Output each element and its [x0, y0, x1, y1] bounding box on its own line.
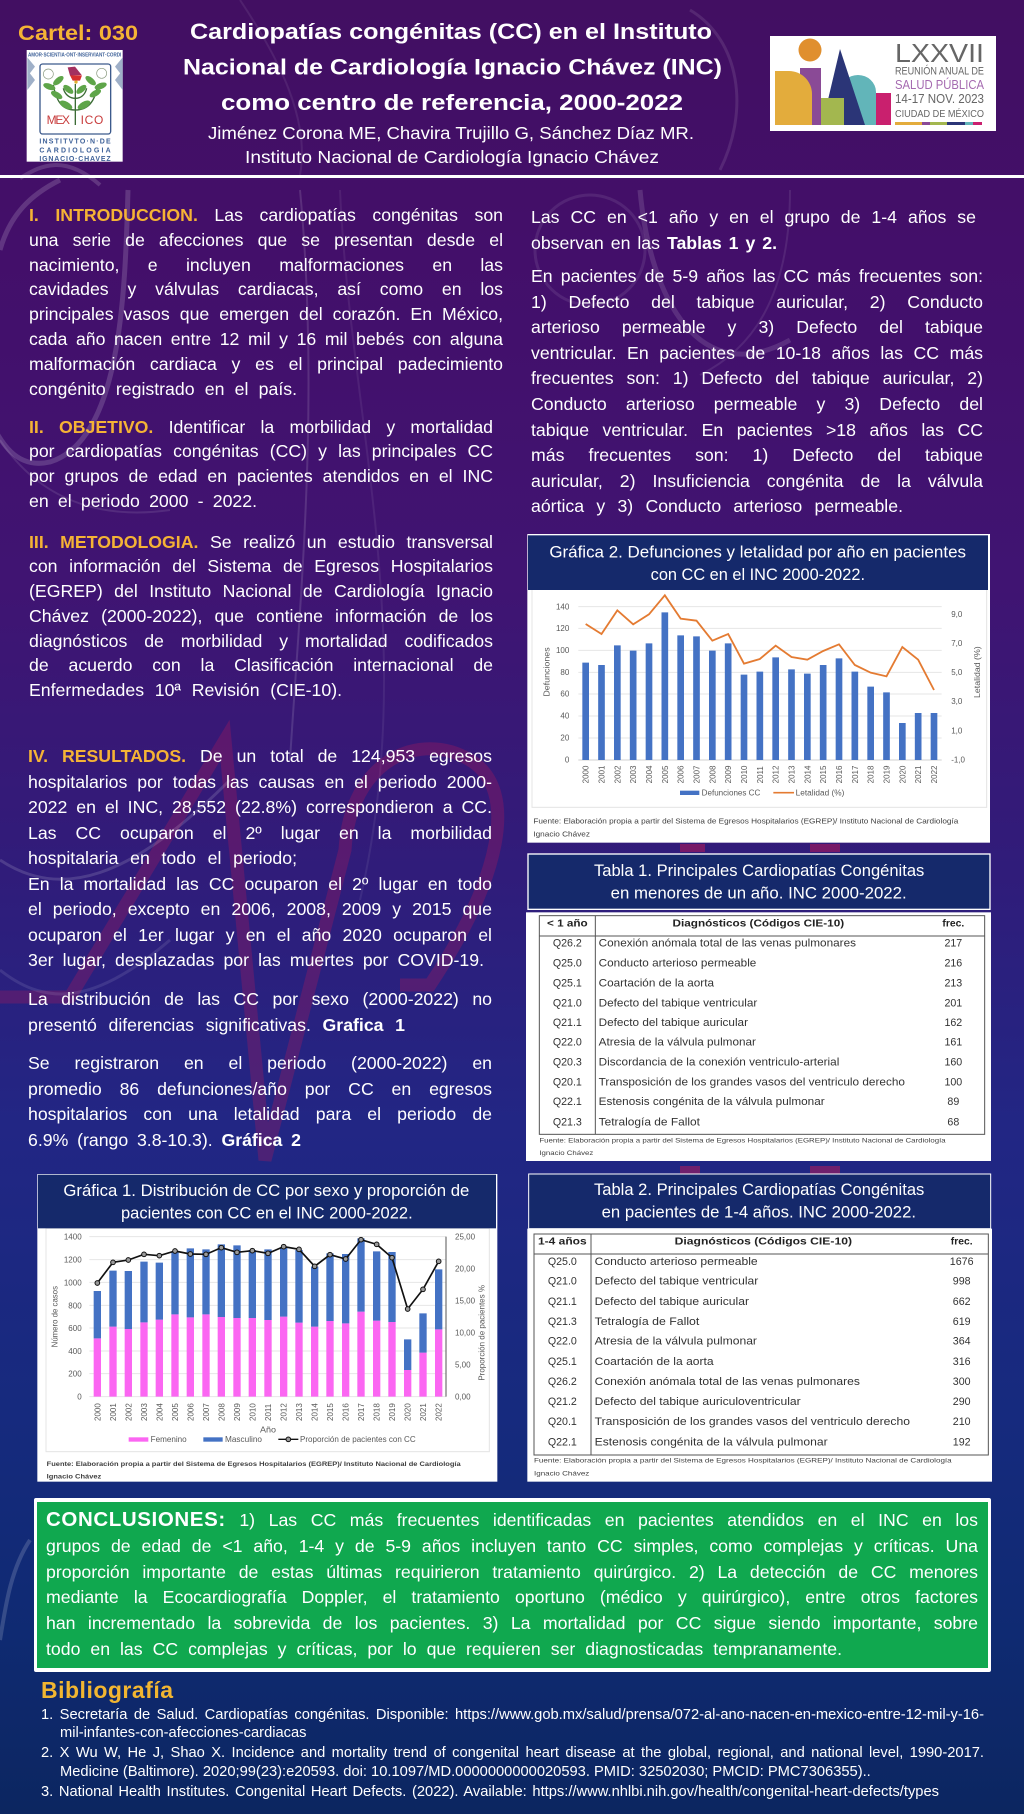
year labels: 2021 — [914, 765, 923, 783]
year labels: 2009 — [724, 765, 733, 783]
title: Cardiopatías congénitas (CC) en el Instituto — [190, 19, 712, 44]
authors and institution: Instituto Nacional de Cardiología Ignacio Chávez — [245, 147, 659, 167]
source note — [539, 1137, 946, 1157]
year labels: 2018 — [373, 1403, 382, 1421]
text: conclusiones: mediante la Ecocardiografía Doppler, el tratamiento oportuno (médico y quirúrgico), entre otros factores — [46, 1587, 978, 1607]
text: CC por grupos de edad: frecuentes son: 1) Defecto del tabique auricular, 2) — [531, 368, 983, 388]
left axis labels: 1200 — [64, 1256, 82, 1265]
year labels: 2000 — [582, 765, 591, 783]
text: introducción: principales vasos que emergen del corazón. En México, — [29, 304, 503, 324]
table frequencies: 216 — [944, 958, 962, 970]
table codes — [553, 938, 582, 1128]
source note: Fuente: Elaboración propia a partir del Sistema de Egresos Hospitalarios (EGREP)/ Instituto Nacional de Cardiología — [534, 1457, 952, 1464]
text: metodología — [29, 532, 493, 700]
text: metodología: con información del Sistema de Egresos Hospitalarios — [29, 556, 493, 576]
text: conclusiones: todo en las CC complejas y críticas, por lo que requieren ser diagnosticadas tempranamente. — [46, 1639, 842, 1659]
table frequencies: 290 — [953, 1396, 971, 1408]
text: CC por grupos de edad: En pacientes de 5-9 años las CC más frecuentes son: — [531, 266, 983, 286]
table frequencies: 316 — [953, 1356, 971, 1368]
table frequencies: 998 — [953, 1276, 971, 1288]
table frequencies: 300 — [953, 1376, 971, 1388]
text: defunciones: promedio 86 defunciones/año por CC en egresos — [28, 1079, 492, 1099]
right axis labels: 0,00 — [455, 1393, 471, 1402]
table header: frec. — [942, 918, 964, 929]
panel heading: Gráfica 2. Defunciones y letalidad por año en pacientes — [549, 542, 966, 561]
year labels: 2017 — [851, 765, 860, 783]
table codes: Q20.3 — [553, 1057, 582, 1069]
text: tablas: Las CC en <1 año y en el grupo de 1-4 años se — [531, 207, 976, 227]
text: CC por grupos de edad: ventricular. En pacientes de 10-18 años las CC más — [531, 343, 983, 363]
axis titles: Año — [260, 1425, 277, 1434]
text: metodología: Chávez (2000-2022), que contiene información de los — [29, 606, 493, 626]
panel: Tabla 1 — [526, 853, 991, 1161]
text: resultados: IV. RESULTADOS. De un total de 124,953 egresos — [28, 746, 492, 766]
table diagnoses — [599, 938, 905, 1128]
left axis labels: 80 — [560, 668, 570, 677]
table frequencies: 662 — [953, 1296, 971, 1308]
table codes: Q25.1 — [553, 977, 582, 989]
left axis labels: 20 — [560, 734, 570, 743]
logo: Instituto Nacional de Cardiología: ICO — [81, 113, 103, 127]
table codes: Q21.0 — [553, 997, 582, 1009]
title: como centro de referencia, 2000-2022 — [221, 90, 683, 115]
text: conclusiones — [46, 1508, 978, 1659]
text: resultados: 2022 en el INC, 28,552 (22.8%) correspondieron a CC. — [28, 797, 492, 817]
table frequencies: 210 — [953, 1416, 971, 1428]
table codes: Q22.0 — [548, 1336, 577, 1348]
table codes: Q22.1 — [553, 1096, 582, 1108]
source note: Fuente: Elaboración propia a partir del Sistema de Egresos Hospitalarios (EGREP)/ Instituto Nacional de Cardiología — [539, 1137, 946, 1144]
axis titles: Letalidad (%) — [973, 646, 982, 698]
table frequencies: 162 — [944, 1017, 962, 1029]
table diagnoses: Defecto del tabique auricular — [599, 1017, 748, 1029]
text: referencias: 2. X Wu W, He J, Shao X. Incidence and mortality trend of congenital heart disease at the global, regional, and national level, 1990-2017. — [41, 1745, 984, 1761]
table diagnoses: Discordancia de la conexión ventriculo-arterial — [599, 1057, 839, 1069]
panel heading — [38, 1175, 496, 1228]
text: distribución por sexo: La distribución de las CC por sexo (2000-2022) no — [28, 989, 492, 1009]
axis titles: Defunciones — [542, 647, 551, 697]
logo: LXXVII Reunión Anual de Salud Pública: CIUDAD DE MÉXICO — [895, 107, 984, 120]
year labels: 2008 — [708, 765, 717, 783]
logo: Instituto Nacional de Cardiología: AMOR·SCIENTIA·ONT·INSERVIANT·CORDI — [28, 52, 122, 58]
table frequencies: 160 — [944, 1057, 962, 1069]
table diagnoses: Atresia de la válvula pulmonar — [595, 1336, 757, 1348]
year labels: 2004 — [155, 1403, 164, 1421]
panel heading: Tabla 1. Principales Cardiopatías Congénitas — [594, 861, 924, 880]
text: resultados — [28, 746, 492, 970]
year labels: 2012 — [280, 1403, 289, 1421]
year labels: 2013 — [295, 1403, 304, 1421]
table codes: Q20.1 — [553, 1076, 582, 1088]
text: metodología: III. METODOLOGIA. Se realizó un estudio transversal — [29, 532, 493, 552]
table diagnoses — [595, 1256, 910, 1448]
table codes: Q21.1 — [553, 1017, 582, 1029]
year labels — [93, 1403, 444, 1421]
logo: Instituto Nacional de Cardiología: INSTITVTO·N·DE — [39, 139, 111, 146]
year labels: 2006 — [677, 765, 686, 783]
text: CC por grupos de edad: tabique ventricular. En pacientes >18 años las CC — [531, 420, 983, 440]
text: distribución por sexo — [28, 989, 492, 1035]
left axis labels: 0 — [77, 1393, 82, 1402]
table frequencies: 213 — [944, 977, 962, 989]
table codes: Q25.0 — [553, 958, 582, 970]
table frequencies: 364 — [953, 1336, 971, 1348]
right axis labels: 10,00 — [455, 1329, 476, 1338]
panel: conclusiones — [34, 1498, 991, 1672]
year labels: 2002 — [613, 765, 622, 783]
text: introducción: cada año nacen entre 12 mil y 16 mil bebés con alguna — [29, 329, 503, 349]
text: metodología: (EGREP) del Instituto Nacional de Cardiología Ignacio — [29, 581, 493, 601]
legend: Femenino — [151, 1435, 187, 1444]
axis titles: Número de casos — [50, 1286, 59, 1347]
axis titles — [50, 1285, 487, 1434]
text: CC por grupos de edad: 1) Defecto del tabique auricular, 2) Conducto — [531, 292, 983, 312]
text: CC por grupos de edad: auricular, 2) Insuficiencia congénita de la válvula — [531, 471, 983, 491]
authors and institution: Jiménez Corona ME, Chavira Trujillo G, Sánchez Díaz MR. — [208, 123, 694, 143]
text: introducción: nacimiento, e incluyen malformaciones en las — [29, 255, 503, 275]
logo: Instituto Nacional de Cardiología: MEX — [47, 113, 70, 127]
source note: Ignacio Chávez — [47, 1473, 102, 1480]
table codes — [548, 1256, 577, 1448]
text: metodología: diagnósticos de morbilidad y mortalidad codificados — [29, 631, 493, 651]
table frequencies: 100 — [944, 1076, 962, 1088]
table frequencies: 1676 — [950, 1256, 974, 1268]
year labels — [582, 765, 939, 783]
text: defunciones — [28, 1053, 492, 1150]
legend: Masculino — [225, 1435, 263, 1444]
source note — [534, 1457, 952, 1478]
year labels: 2019 — [882, 765, 892, 783]
text: defunciones: hospitalarios con una letalidad para el periodo de — [28, 1104, 492, 1124]
left axis labels: 200 — [68, 1370, 82, 1379]
table header: Diagnósticos (Códigos CIE-10) — [672, 918, 844, 929]
right axis labels: 9,0 — [951, 610, 963, 619]
table codes: Q25.1 — [548, 1356, 577, 1368]
table diagnoses: Defecto del tabique auriculoventricular — [595, 1396, 801, 1408]
panel heading: en menores de un año. INC 2000-2022. — [611, 883, 907, 902]
year labels: 2015 — [819, 765, 828, 783]
year labels: 2011 — [264, 1403, 273, 1421]
table diagnoses: Transposición de los grandes vasos del ventriculo derecho — [595, 1416, 910, 1428]
legend — [680, 789, 845, 798]
text: objetivo: por grupos de edad en pacientes atendidos en el INC — [29, 466, 493, 486]
left axis labels: 120 — [556, 624, 570, 633]
table frequencies — [944, 938, 962, 1128]
left axis labels: 140 — [556, 602, 570, 611]
year labels: 2006 — [186, 1403, 195, 1421]
left axis labels: 1400 — [64, 1233, 82, 1242]
table: menores de un año — [539, 916, 985, 1134]
year labels: 2013 — [788, 765, 796, 783]
text: introducción: congénito registrado en el país. — [29, 379, 297, 399]
text: resultados: hospitalarios por todas las causas en el periodo 2000- — [28, 772, 492, 792]
left axis labels: 0 — [565, 756, 570, 765]
text: introducción: I. INTRODUCCION. Las cardiopatías congénitas son — [29, 205, 503, 225]
table diagnoses: Atresia de la válvula pulmonar — [599, 1037, 756, 1049]
right axis labels — [455, 1232, 476, 1402]
table codes: Q21.1 — [548, 1296, 577, 1308]
text: CC por grupos de edad: más frecuentes son: 1) Defecto del tabique — [531, 445, 983, 465]
panel heading: Tabla 2. Principales Cardiopatías Congénitas — [594, 1180, 924, 1199]
text: defunciones: 6.9% (rango 3.8-10.3). Gráfica 2 — [28, 1130, 301, 1150]
table diagnoses: Conexión anómala total de las venas pulmonares — [599, 938, 856, 950]
right axis labels: 7,0 — [951, 639, 963, 648]
text: objetivo: por cardiopatías congénitas (CC) y las principales CC — [29, 441, 493, 461]
year labels: 2003 — [629, 765, 638, 783]
text: resultados: 3er lugar, desplazadas por las muertes por COVID-19. — [28, 950, 484, 970]
axis titles: Proporción de pacientes % — [478, 1285, 487, 1381]
table frequencies: 89 — [947, 1096, 959, 1108]
left axis labels: 600 — [68, 1324, 82, 1333]
table frequencies: 201 — [944, 997, 962, 1009]
left axis labels: 40 — [560, 712, 570, 721]
text: metodología: Enfermedades 10ª Revisión (CIE-10). — [29, 680, 342, 700]
year labels: 2004 — [645, 765, 654, 783]
text: introducción: una serie de afecciones que se presentan desde el — [29, 230, 503, 250]
logo: LXXVII Reunión Anual de Salud Pública: LXXVII — [895, 38, 984, 68]
text: introducción — [29, 205, 503, 399]
year labels: 2010 — [740, 765, 749, 783]
table diagnoses: Tetralogía de Fallot — [599, 1116, 700, 1128]
table diagnoses: Conducto arterioso permeable — [595, 1256, 758, 1268]
panel heading — [529, 1174, 991, 1229]
text: introducción: malformación cardiaca y es el principal padecimiento — [29, 354, 503, 374]
table diagnoses: Defecto del tabique ventricular — [595, 1276, 759, 1288]
text: resultados: el periodo, excepto en 2006, 2008, 2009 y 2015 que — [28, 899, 492, 919]
logo: LXXVII Reunión Anual de Salud Pública: REUNIÓN ANUAL DE — [895, 64, 984, 78]
table header: 1-4 años — [538, 1237, 587, 1248]
bars: femenino — [94, 1312, 442, 1397]
year labels: 2022 — [435, 1403, 444, 1421]
table codes: Q22.1 — [548, 1436, 577, 1448]
text: tablas — [531, 207, 976, 253]
text: distribución por sexo: presentó diferencias significativas. Grafica 1 — [28, 1015, 405, 1035]
right axis labels: 5,00 — [455, 1361, 471, 1370]
source note: Fuente: Elaboración propia a partir del Sistema de Egresos Hospitalarios (EGREP)/ Instituto Nacional de Cardiología — [533, 816, 959, 825]
logo: LXXVII Reunión Anual de Salud Pública: 14-17 NOV. 2023 — [895, 91, 984, 106]
table frequencies: 68 — [947, 1116, 959, 1128]
left axis labels — [556, 602, 570, 765]
logo: Instituto Nacional de Cardiología — [27, 50, 123, 163]
text: CC por grupos de edad — [531, 266, 983, 516]
text: objetivo: en el periodo 2000 - 2022. — [29, 491, 257, 511]
text: defunciones: Se registraron en el periodo (2000-2022) en — [28, 1053, 492, 1073]
table header: Diagnósticos (Códigos CIE-10) — [675, 1237, 852, 1248]
right axis labels — [951, 610, 966, 765]
right axis labels: 15,00 — [455, 1297, 476, 1306]
table codes: Q25.0 — [548, 1256, 577, 1268]
text: referencias: 3. National Health Institutes. Congenital Heart Defects. (2022). Available: https://www.nhlbi.nih.gov/health/congenital-heart-defects/types — [41, 1784, 939, 1800]
text: referencias — [41, 1707, 984, 1800]
right axis labels: 20,00 — [455, 1264, 476, 1273]
source note — [533, 816, 959, 839]
year labels: 2018 — [867, 765, 876, 783]
year labels: 2007 — [692, 765, 702, 783]
table codes: Q21.3 — [553, 1116, 582, 1128]
left axis labels: 100 — [556, 646, 570, 655]
source note: Ignacio Chávez — [539, 1150, 593, 1157]
table codes: Q21.0 — [548, 1276, 577, 1288]
year labels: 2005 — [661, 765, 670, 783]
table header — [547, 918, 964, 929]
year labels: 2014 — [803, 765, 812, 783]
table diagnoses: Coartación de la aorta — [599, 977, 714, 989]
table diagnoses: Coartación de la aorta — [595, 1356, 714, 1368]
table codes: Q26.2 — [548, 1376, 577, 1388]
panel: Tabla 2 — [527, 1174, 992, 1482]
text: referencias: 1. Secretaría de Salud. Cardiopatías congénitas. Disponible: https://www.gob.mx/salud/prensa/072-al-ano-nacen-en-mexico-entre-12-mil-y-16- — [41, 1707, 984, 1723]
logo: Instituto Nacional de Cardiología: CARDIOLOGIA — [39, 147, 111, 154]
left axis labels: 1000 — [64, 1278, 82, 1287]
year labels: 2000 — [93, 1403, 102, 1421]
year labels: 2016 — [342, 1403, 351, 1421]
left axis labels: 400 — [68, 1347, 82, 1356]
table header — [538, 1237, 973, 1248]
year labels: 2011 — [756, 766, 765, 783]
title — [183, 19, 722, 115]
right axis labels: 1,0 — [951, 726, 963, 735]
text: CC por grupos de edad: arterioso permeable y 3) Defecto del tabique — [531, 317, 983, 337]
table frequencies: 192 — [953, 1436, 971, 1448]
table frequencies: 161 — [944, 1037, 962, 1049]
table diagnoses: Transposición de los grandes vasos del ventriculo derecho — [599, 1076, 905, 1088]
left axis labels: 60 — [560, 690, 570, 699]
year labels: 2017 — [357, 1403, 366, 1421]
table header: frec. — [951, 1237, 973, 1248]
legend: Letalidad (%) — [796, 789, 845, 798]
heading: bibliografía: Bibliografía — [41, 1677, 174, 1703]
year labels: 2007 — [202, 1403, 211, 1421]
year labels: 2003 — [140, 1403, 149, 1421]
text: tablas: observan en las Tablas 1 y 2. — [531, 233, 777, 253]
axis titles — [542, 646, 982, 698]
year labels: 2016 — [835, 765, 844, 783]
bars: defunciones — [582, 612, 937, 760]
panel heading — [528, 854, 990, 909]
left axis labels: 800 — [68, 1301, 82, 1310]
source note: Ignacio Chávez — [533, 830, 590, 839]
year labels: 2021 — [419, 1403, 428, 1421]
year labels: 2014 — [311, 1403, 320, 1421]
table diagnoses: Estenosis congénita de la válvula pulmonar — [595, 1436, 828, 1448]
text: referencias: mil-infantes-con-afecciones-cardiacas — [60, 1725, 307, 1741]
table: 1-4 años — [534, 1234, 988, 1455]
combo chart: defunciones and letalidad — [542, 595, 982, 798]
table codes: Q21.3 — [548, 1316, 577, 1328]
text: introducción: cavidades y válvulas cardiacas, así como en los — [29, 279, 503, 299]
year labels: 2001 — [598, 765, 606, 783]
year labels: 2015 — [326, 1403, 335, 1421]
line: proporción de pacientes — [95, 1237, 441, 1311]
source note: Ignacio Chávez — [534, 1471, 589, 1478]
source note: Fuente: Elaboración propia a partir del Sistema de Egresos Hospitalarios (EGREP)/ Instituto Nacional de Cardiología — [47, 1461, 461, 1468]
panel: Gráfica 1 — [37, 1174, 498, 1482]
poster number: Cartel: 030 — [18, 22, 138, 45]
table codes: Q26.2 — [553, 938, 582, 950]
text: resultados: ocuparon el 1er lugar y en el año 2020 ocuparon el — [28, 925, 492, 945]
table diagnoses: Conducto arterioso permeable — [599, 958, 756, 970]
header band — [18, 19, 996, 167]
year labels: 2009 — [233, 1403, 242, 1421]
table frequencies — [950, 1256, 974, 1448]
year labels: 2020 — [404, 1403, 413, 1421]
year labels: 2022 — [930, 765, 939, 783]
legend — [129, 1435, 416, 1444]
year labels: 2002 — [124, 1403, 133, 1421]
logo: LXXVII Reunión Anual de Salud Pública — [770, 36, 996, 131]
right axis labels: 25,00 — [455, 1232, 476, 1241]
table codes: Q22.0 — [553, 1037, 582, 1049]
bars: masculino — [94, 1238, 442, 1370]
legend: Proporción de pacientes con CC — [300, 1435, 416, 1444]
table diagnoses: Estenosis congénita de la válvula pulmonar — [599, 1096, 825, 1108]
text: conclusiones: han incrementado la sobrevida de los pacientes. 3) La mortalidad por CC sigue siendo importante, sobre — [46, 1613, 978, 1633]
right axis labels: 5,0 — [951, 668, 963, 677]
logo: Instituto Nacional de Cardiología: IGNACIO·CHAVEZ — [39, 156, 111, 163]
table frequencies: 619 — [953, 1316, 971, 1328]
right axis labels: 3,0 — [951, 697, 963, 706]
panel heading: pacientes con CC en el INC 2000-2022. — [121, 1203, 413, 1222]
combo chart: casos por sexo y proporción — [50, 1232, 487, 1444]
year labels: 2001 — [109, 1403, 118, 1421]
title: Nacional de Cardiología Ignacio Chávez (INC) — [183, 54, 722, 80]
source note — [47, 1461, 461, 1480]
year labels: 2005 — [171, 1403, 180, 1421]
text: CC por grupos de edad: Conducto arterioso permeable y 3) Defecto del — [531, 394, 983, 414]
text: objetivo: II. OBJETIVO. Identificar la morbilidad y mortalidad — [29, 417, 493, 437]
panel heading — [528, 535, 988, 590]
left axis labels — [64, 1233, 82, 1402]
right axis labels: -1,0 — [951, 756, 966, 765]
table header: < 1 año — [547, 918, 588, 929]
panel heading: Gráfica 1. Distribución de CC por sexo y proporción de — [63, 1181, 469, 1200]
authors and institution — [208, 123, 694, 167]
text: resultados: En la mortalidad las CC ocuparon el 2º lugar en todo — [28, 874, 492, 894]
table diagnoses: Tetralogía de Fallot — [595, 1316, 699, 1328]
text: conclusiones: CONCLUSIONES: 1) Las CC más frecuentes identificadas en pacientes atendidos en el INC en los — [46, 1508, 978, 1531]
table codes: Q21.2 — [548, 1396, 577, 1408]
panel heading: con CC en el INC 2000-2022. — [651, 565, 865, 584]
table frequencies: 217 — [944, 938, 962, 950]
table diagnoses: Defecto del tabique auricular — [595, 1296, 750, 1308]
legend: Defunciones CC — [702, 789, 761, 798]
text: resultados: Las CC ocuparon el 2º lugar en la morbilidad — [28, 823, 492, 843]
panel: Gráfica 2 — [527, 534, 990, 843]
table diagnoses: Conexión anómala total de las venas pulmonares — [595, 1376, 860, 1388]
text: metodología: de acuerdo con la Clasificación internacional de — [29, 655, 493, 675]
year labels: 2019 — [388, 1403, 397, 1421]
table codes: Q20.1 — [548, 1416, 577, 1428]
text: objetivo — [29, 417, 493, 511]
text: resultados: hospitalaria en todo el periodo; — [28, 848, 297, 868]
line: letalidad — [586, 595, 934, 690]
year labels: 2008 — [217, 1403, 226, 1421]
text: conclusiones: grupos de edad de <1 año, 1-4 y de 5-9 años incluyen tanto CC simples, como complejas y críticas. Una — [46, 1536, 978, 1556]
year labels: 2012 — [772, 765, 781, 783]
text: CC por grupos de edad: aórtica y 3) Conducto arterioso permeable. — [531, 496, 903, 516]
year labels: 2010 — [248, 1403, 257, 1421]
panel heading: en pacientes de 1-4 años. INC 2000-2022. — [602, 1202, 916, 1221]
text: conclusiones: proporción importante de estas últimas requirieron tratamiento quirúrgico. 2) La detección de CC menores — [46, 1562, 978, 1582]
table diagnoses: Defecto del tabique ventricular — [599, 997, 758, 1009]
year labels: 2020 — [898, 765, 907, 783]
text: referencias: Medicine (Baltimore). 2020;99(23):e20593. doi: 10.1097/MD.0000000000020593. PMID: 32502030; PMCID: PMC7306355).. — [60, 1764, 871, 1780]
logo: LXXVII Reunión Anual de Salud Pública: SALUD PÚBLICA — [895, 77, 984, 92]
